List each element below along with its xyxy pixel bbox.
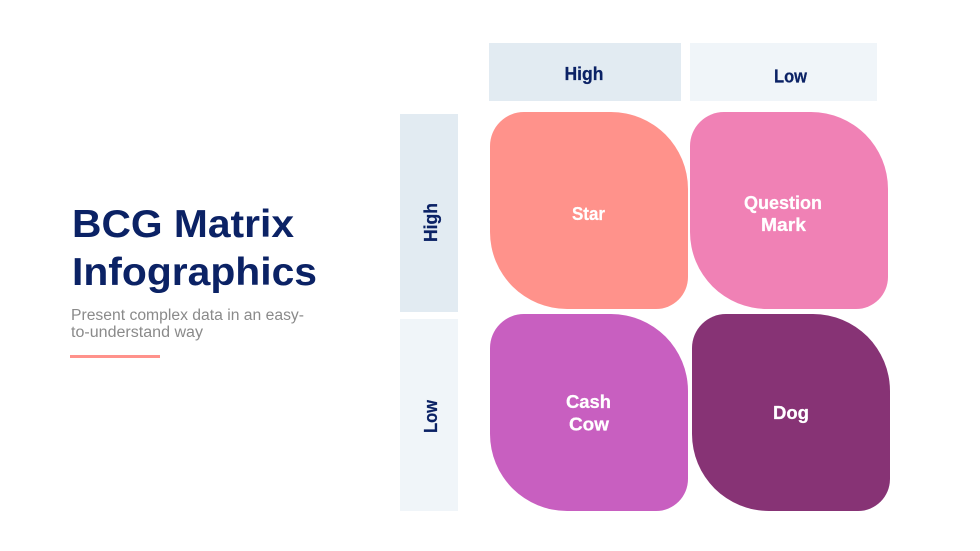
column header: Low: Low: [774, 66, 808, 86]
column header: Low: [690, 43, 877, 101]
quadrant: Star: [490, 112, 688, 309]
title: BCG Matrix: [72, 203, 294, 246]
row header: Low: [400, 319, 458, 511]
column header: High: [489, 43, 681, 101]
row header: High: [400, 114, 458, 312]
quadrant: Dog: [692, 314, 890, 511]
subtitle: to-understand way: [71, 324, 203, 341]
quadrant: Question Mark: Mark: [761, 214, 807, 235]
quadrant: Cash Cow: Cash: [566, 391, 611, 412]
title: [72, 203, 317, 294]
quadrant: Dog: Dog: [773, 402, 809, 423]
row header: High: High: [420, 203, 441, 242]
accent rule: [70, 355, 160, 358]
subtitle: [71, 307, 304, 341]
subtitle: Present complex data in an easy-: [71, 307, 304, 324]
quadrant: Question Mark: Question: [744, 192, 822, 213]
row header: Low: Low: [420, 399, 441, 433]
quadrant: Cash Cow: Cow: [569, 414, 610, 434]
title: Infographics: [72, 251, 317, 294]
quadrant: Question Mark: [690, 112, 888, 309]
quadrant: Cash Cow: [490, 314, 688, 511]
column header: High: High: [564, 63, 604, 84]
quadrant: Star: Star: [572, 203, 605, 224]
